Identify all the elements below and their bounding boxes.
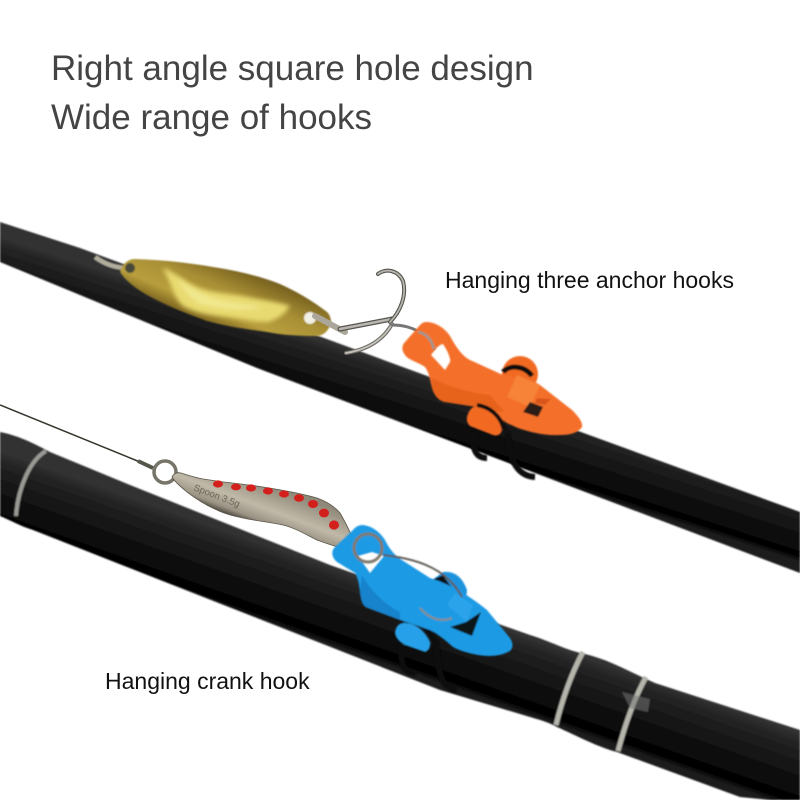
orange hook keeper bbox=[402, 322, 582, 477]
upper ear bbox=[427, 572, 467, 600]
lower ear bbox=[467, 406, 502, 435]
spoon body bbox=[120, 259, 331, 336]
bottom fishing rod bbox=[0, 432, 800, 800]
spoon body bbox=[172, 473, 357, 551]
raised block bbox=[507, 375, 540, 407]
rod glare bbox=[622, 692, 650, 712]
window bbox=[450, 612, 481, 636]
top fishing rod bbox=[0, 222, 800, 573]
silver spoon lure bbox=[0, 405, 357, 551]
body bbox=[402, 322, 582, 435]
title: Wide range of hooks bbox=[51, 98, 372, 137]
hook eye bbox=[418, 332, 434, 349]
blue hook keeper bbox=[332, 525, 512, 690]
steel ring bbox=[354, 534, 382, 562]
fishing line bbox=[0, 405, 140, 462]
split ring bbox=[154, 461, 176, 483]
rod band: left bbox=[16, 451, 46, 516]
red gems bbox=[213, 480, 339, 530]
body bbox=[332, 525, 512, 656]
raised block bbox=[447, 593, 473, 622]
left ring bbox=[95, 257, 128, 268]
upper ear bbox=[502, 356, 538, 392]
rod band: middle bbox=[556, 652, 583, 725]
spoon holes bbox=[125, 263, 135, 273]
highlight bbox=[163, 268, 290, 322]
knot bbox=[138, 461, 153, 468]
title bbox=[51, 49, 534, 137]
text: hanging crank hook: Hanging crank hook bbox=[105, 668, 310, 694]
lower ear bbox=[395, 623, 430, 652]
square hole bbox=[523, 402, 543, 417]
gold spoon lure bbox=[95, 257, 331, 336]
treble hook bbox=[315, 271, 434, 353]
engraved text: Spoon 3.5g bbox=[192, 483, 241, 510]
crank hook bbox=[383, 555, 462, 597]
body shading bbox=[360, 575, 400, 620]
rod band: right bbox=[618, 677, 646, 751]
rubber rings bbox=[401, 621, 457, 690]
title: Right angle square hole design bbox=[51, 49, 534, 88]
body shading bbox=[432, 378, 505, 412]
rubber rings bbox=[473, 432, 535, 477]
text: hanging three anchor hooks: Hanging three anchor hooks bbox=[445, 267, 734, 293]
